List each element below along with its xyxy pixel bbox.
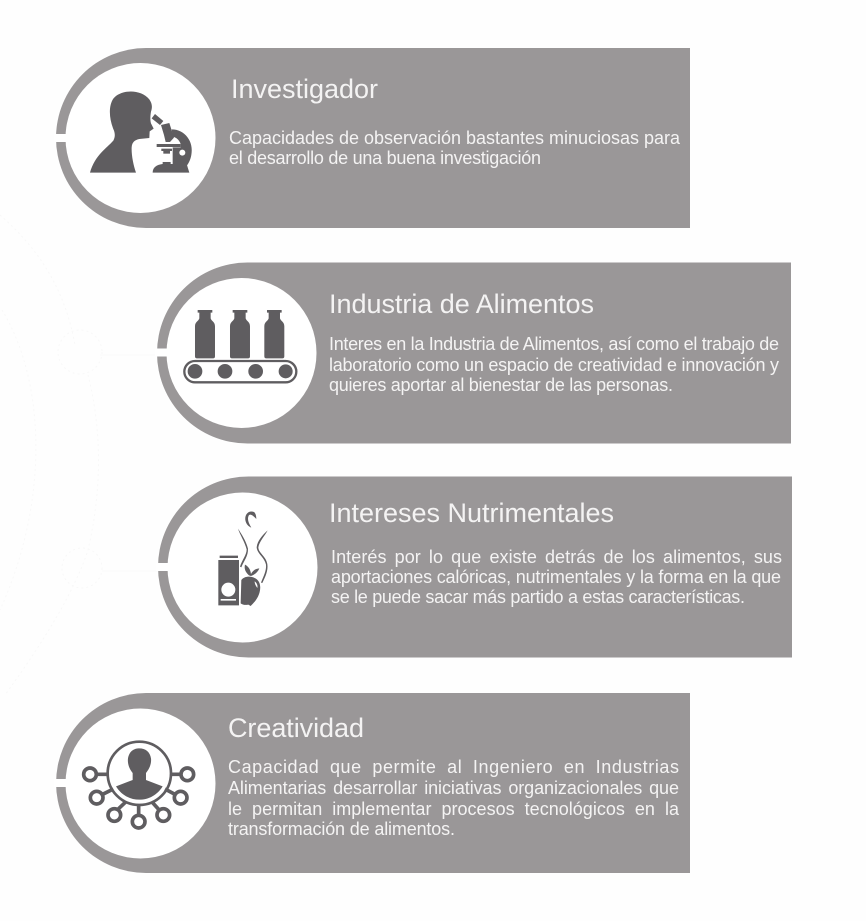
title: Industria de Alimentos: Industria de Alimentos (329, 289, 594, 319)
text: Intereses Nutrimentales description: se le puede sacar más partido a estas características. (331, 587, 745, 607)
text: Industria de Alimentos description: Interes en la Industria de Alimentos, así como el trabajo de (329, 334, 779, 354)
icon circle: Intereses Nutrimentales (168, 492, 318, 642)
text: Intereses Nutrimentales description (331, 547, 782, 607)
panel: Creatividad (54, 693, 690, 873)
text: Creatividad description: transformación de alimentos. (228, 819, 455, 839)
text: Investigador description: Capacidades de observación bastantes minuciosas para (229, 128, 681, 148)
text: Intereses Nutrimentales description: aportaciones calóricas, nutrimentales y la forma en la que (331, 567, 781, 587)
icon: person network (84, 742, 194, 828)
text: Industria de Alimentos description: quieres aportar al bienestar de las personas. (329, 375, 673, 395)
icon circle: Creatividad (66, 708, 216, 858)
title: Intereses Nutrimentales: Intereses Nutrimentales (329, 498, 614, 528)
panel: Investigador (54, 48, 690, 228)
title: Creatividad: Creatividad (228, 713, 364, 743)
panel: Industria de Alimentos (155, 262, 791, 444)
icon: person at microscope (90, 91, 192, 173)
title: Investigador: Investigador (231, 74, 378, 104)
icon: body silhouette with food (218, 512, 268, 606)
text: Industria de Alimentos description (329, 334, 779, 395)
text: Investigador description: el desarrollo de una buena investigación (229, 148, 541, 168)
icon circle: Investigador (66, 63, 216, 213)
text: Creatividad description: Capacidad que permite al Ingeniero en Industrias (228, 757, 679, 777)
text: Creatividad description: Alimentarias desarrollar iniciativas organizacionales que (228, 778, 679, 798)
icon circle: Industria de Alimentos (166, 278, 316, 428)
panel: Intereses Nutrimentales (156, 476, 792, 658)
text: Industria de Alimentos description: laboratorio como un espacio de creatividad e innovación y (329, 355, 779, 375)
text: Creatividad description: le permitan implementar procesos tecnológicos en la (228, 799, 680, 819)
icon: bottles on conveyor belt (184, 310, 296, 382)
text: Intereses Nutrimentales description: Interés por lo que existe detrás de los alimentos, sus (331, 547, 782, 567)
text: Investigador description (229, 128, 681, 168)
text: Creatividad description (228, 757, 680, 839)
